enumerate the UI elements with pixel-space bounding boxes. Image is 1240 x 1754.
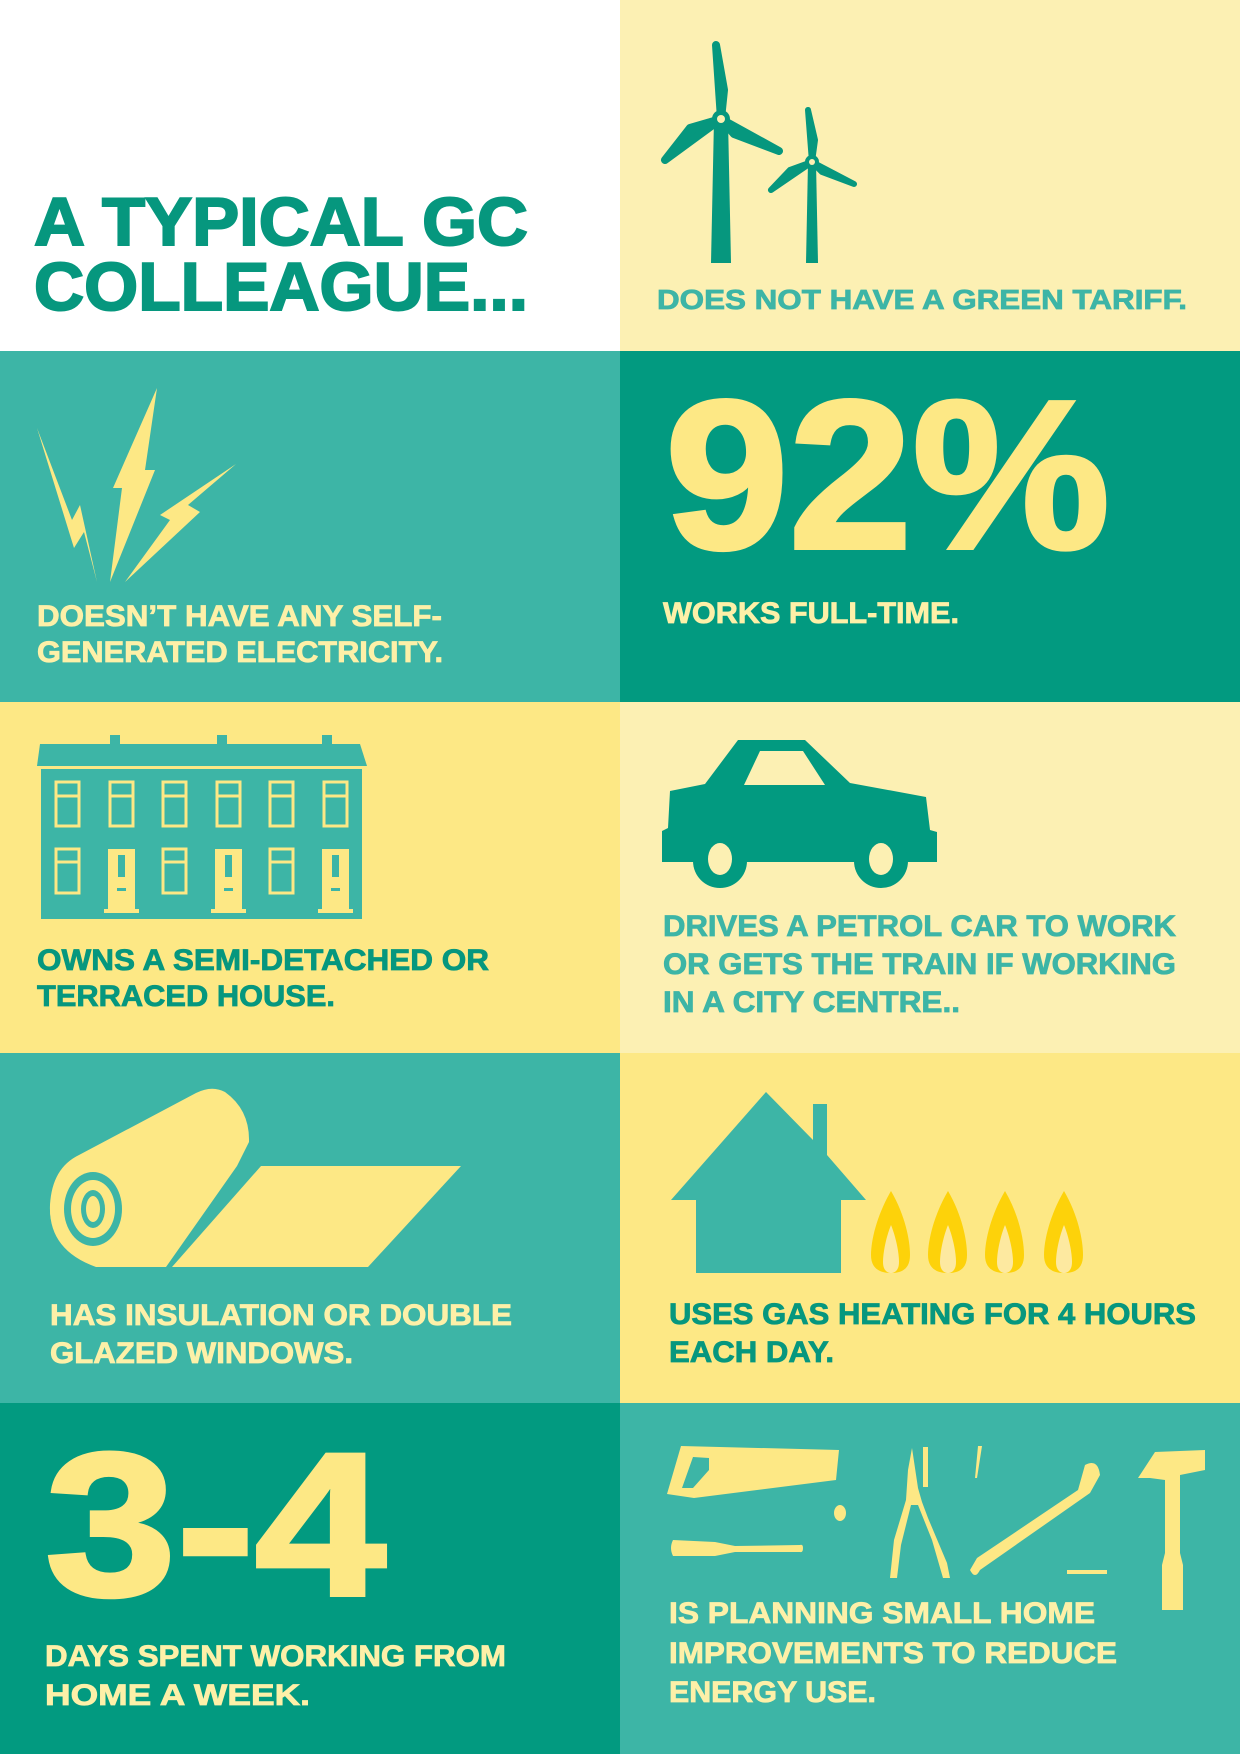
panel: working from home <box>0 1403 620 1754</box>
icon: house <box>671 1092 866 1273</box>
text: car: OR GETS THE TRAIN IF WORKING <box>663 948 1176 981</box>
panel: house type <box>0 702 620 1053</box>
text: insulation: HAS INSULATION OR DOUBLE <box>50 1299 512 1332</box>
panel: insulation <box>0 1053 620 1403</box>
text: house type: TERRACED HOUSE. <box>37 980 335 1013</box>
icon: insulation roll <box>50 1089 461 1267</box>
icon: tools <box>667 1446 1205 1610</box>
text: home improvements: IMPROVEMENTS TO REDUCE <box>669 1637 1117 1670</box>
text: car <box>663 910 1176 1019</box>
panel: full-time <box>620 351 1240 702</box>
text: days from home <box>45 1640 506 1712</box>
panel: self-generated electricity <box>0 351 620 702</box>
text: electricity: GENERATED ELECTRICITY. <box>37 636 443 669</box>
title: A TYPICAL GC <box>34 184 528 260</box>
text: home improvements <box>669 1597 1117 1709</box>
text: electricity: DOESN’T HAVE ANY SELF- <box>37 600 442 633</box>
text: insulation: GLAZED WINDOWS. <box>50 1337 353 1370</box>
text: home improvements: IS PLANNING SMALL HOME <box>669 1597 1095 1630</box>
icon: terraced houses <box>37 735 367 919</box>
text: car: IN A CITY CENTRE.. <box>663 986 960 1019</box>
text: home improvements: ENERGY USE. <box>669 1676 876 1709</box>
panel: green tariff <box>620 0 1240 351</box>
icon: gas flames <box>871 1191 1083 1273</box>
panel: car <box>620 702 1240 1053</box>
stat: 3-4: 3-4 <box>45 1411 386 1639</box>
text: days from home: DAYS SPENT WORKING FROM <box>45 1640 506 1673</box>
text: full-time: WORKS FULL-TIME. <box>663 597 959 630</box>
text: green tariff: DOES NOT HAVE A GREEN TARIFF. <box>657 284 1187 315</box>
icon: lightning bolts <box>37 388 236 582</box>
text: car: DRIVES A PETROL CAR TO WORK <box>663 910 1176 943</box>
text: house type: OWNS A SEMI-DETACHED OR <box>37 944 489 977</box>
text: electricity <box>37 600 443 669</box>
text: gas heating: EACH DAY. <box>669 1336 834 1369</box>
text: house type <box>37 944 489 1013</box>
title <box>34 184 528 325</box>
panel: gas heating <box>620 1053 1240 1403</box>
text: gas heating: USES GAS HEATING FOR 4 HOURS <box>669 1298 1196 1331</box>
stat: 92%: 92% <box>665 356 1110 593</box>
text: gas heating <box>669 1298 1196 1369</box>
icon: wind turbines <box>665 45 854 263</box>
title: COLLEAGUE... <box>34 249 528 325</box>
panel: home improvements <box>620 1403 1240 1754</box>
icon: car <box>662 740 937 888</box>
text: days from home: HOME A WEEK. <box>45 1679 310 1712</box>
text: insulation <box>50 1299 512 1370</box>
panel: title <box>0 0 620 351</box>
